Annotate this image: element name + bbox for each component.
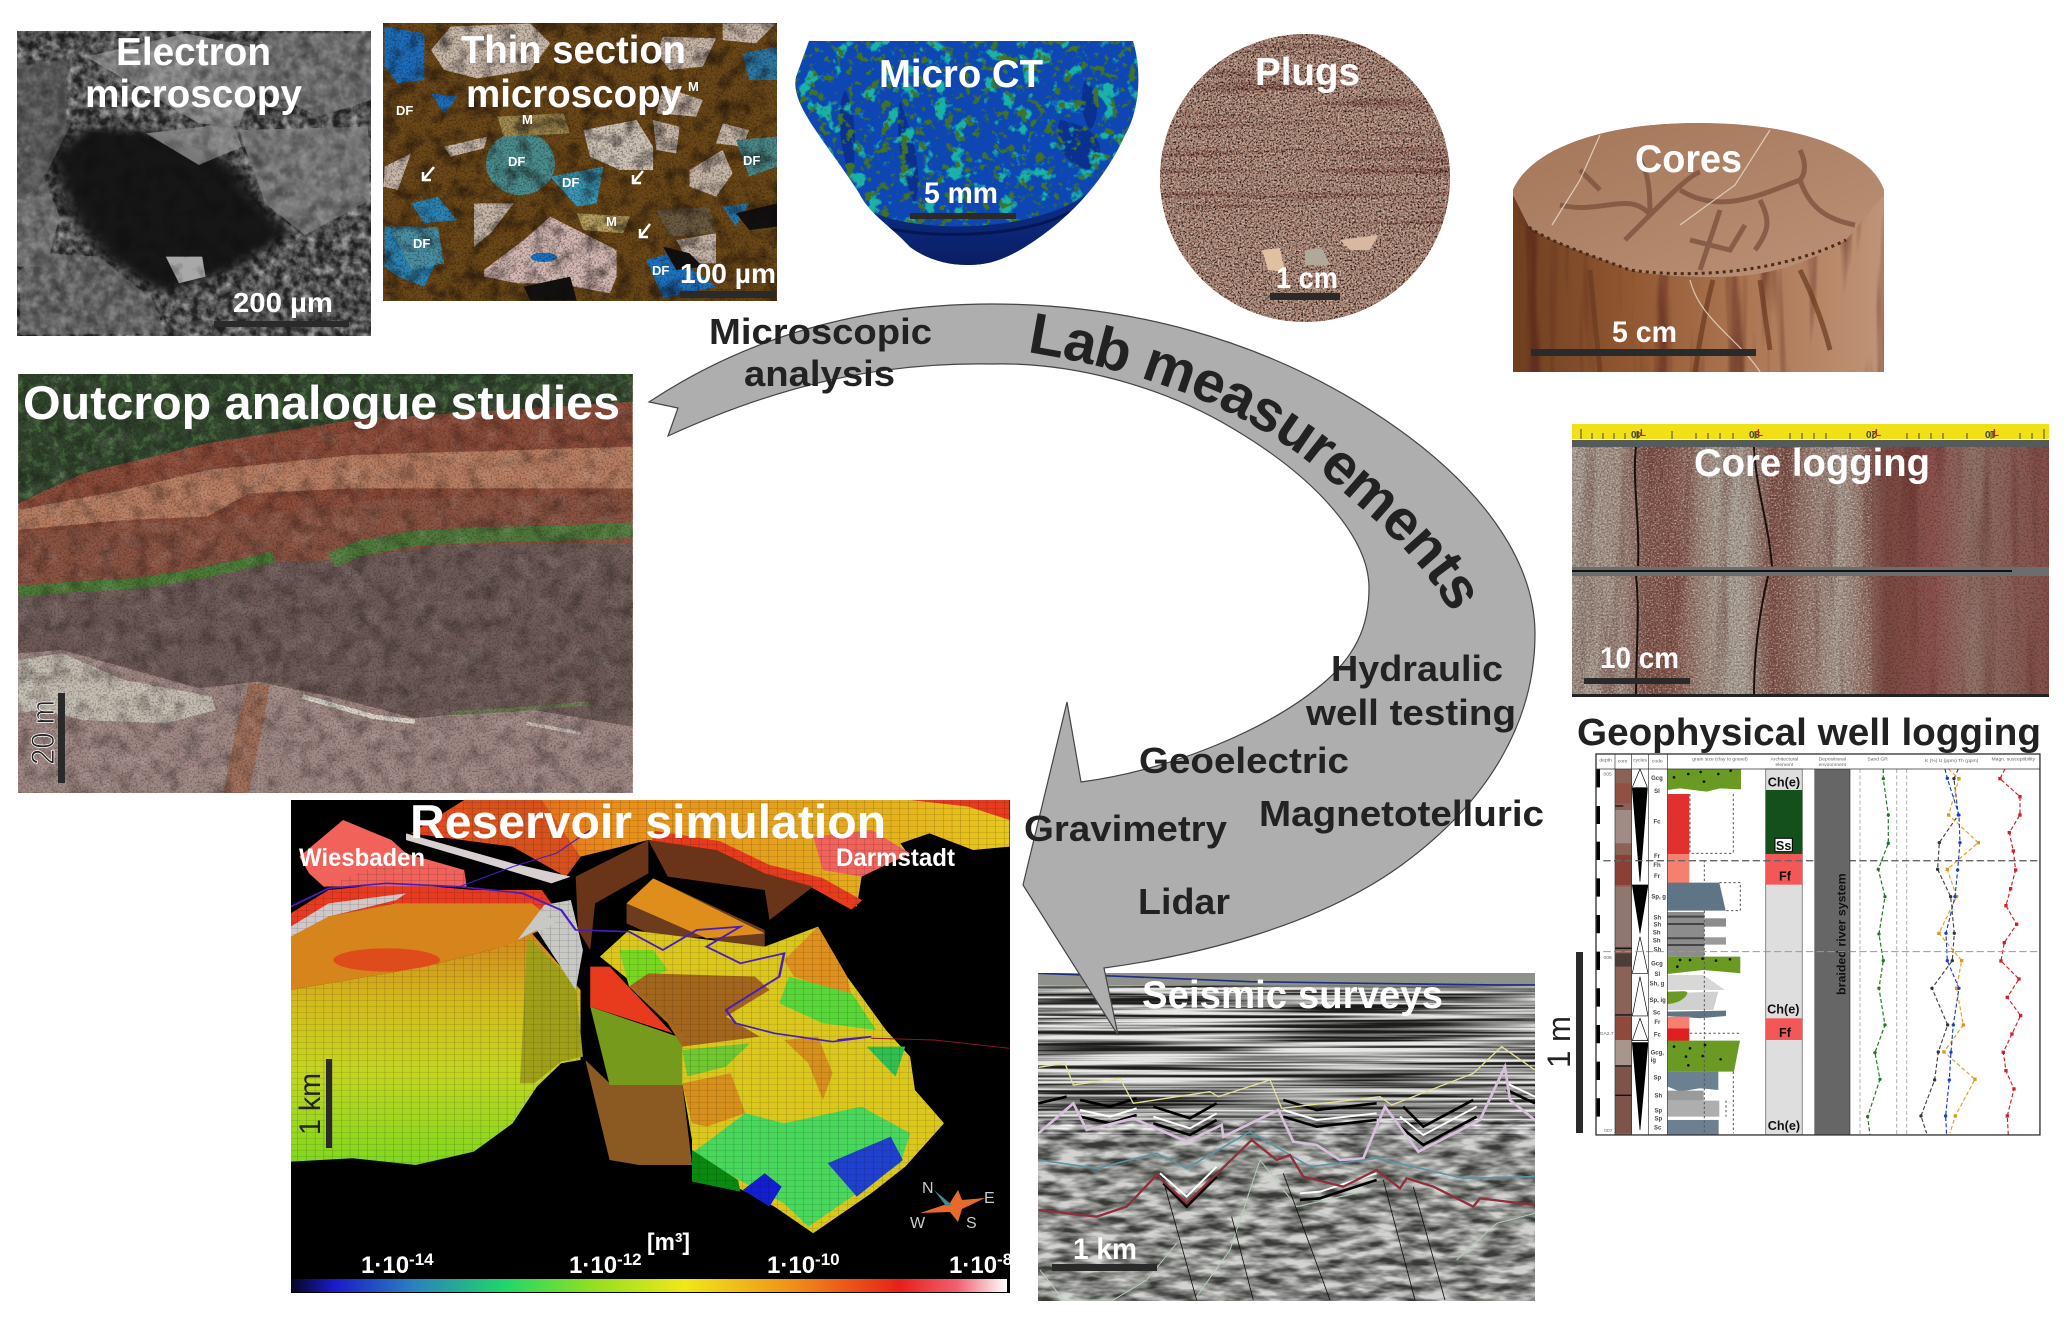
scale bar: 1 m — [1541, 952, 1583, 1133]
facies codes: Sl — [1654, 972, 1660, 978]
measuring tape: 10 — [1984, 428, 1996, 439]
mineral labels — [396, 79, 760, 278]
column headers: code — [1652, 759, 1663, 765]
column headers: environment — [1819, 762, 1847, 768]
city labels: Darmstadt — [836, 844, 956, 872]
panel: reservoir simulation — [291, 795, 1012, 1293]
panel: core logging — [1572, 424, 2049, 697]
heading: Electron — [116, 31, 271, 74]
facies codes: Sh — [1653, 948, 1661, 954]
scale bar: 5 cm — [1531, 316, 1756, 356]
mineral labels: M — [606, 214, 617, 229]
facies codes: Gcg, — [1651, 1050, 1664, 1056]
architectural element column: Ff — [1779, 869, 1792, 883]
icon: compass: N — [922, 1180, 934, 1197]
icon: compass — [910, 1180, 995, 1232]
measuring tape: L — [1993, 428, 1999, 439]
panel: plugs — [1160, 34, 1450, 322]
icon: compass: S — [966, 1215, 977, 1232]
colour scale — [291, 1279, 1007, 1292]
depositional environment column: braided river system — [1835, 873, 1849, 995]
arrows — [423, 167, 650, 237]
mineral labels: DF — [652, 263, 669, 278]
curved heading: Lab measurements: Lab measurements — [1030, 313, 1473, 608]
architectural element column: Ch(e) — [1768, 1119, 1800, 1133]
heading: Geophysical well logging — [1577, 712, 2041, 754]
facies codes: Sp — [1654, 1109, 1662, 1115]
mineral labels: DF — [413, 236, 430, 251]
label: microscopic analysis: analysis — [744, 353, 895, 394]
facies codes: Sh — [1653, 923, 1661, 929]
scale bar: 1 cm: 1 cm — [1276, 262, 1338, 295]
label: microscopic analysis — [709, 311, 932, 394]
column headers: Magn. susceptibility — [1992, 757, 2036, 763]
mineral labels: DF — [743, 153, 760, 168]
facies codes: Sp, ig — [1650, 998, 1666, 1004]
label: lidar: Lidar — [1138, 881, 1230, 922]
column headers: grain size (clay to gravel) — [1692, 757, 1748, 763]
depth ruler: 006 — [1603, 955, 1612, 961]
label: hydraulic well testing — [1305, 648, 1516, 733]
heading: microscopy — [466, 73, 682, 116]
facies codes: Fr — [1654, 1020, 1661, 1026]
column headers: element — [1775, 762, 1794, 768]
scale bar: 1 m: 1 m — [1541, 1016, 1577, 1068]
SEM image — [17, 31, 371, 336]
micro CT image — [790, 41, 1145, 270]
facies codes: Gcg — [1651, 776, 1663, 782]
lithology column — [1668, 769, 1741, 1135]
scale bar: 5 cm: 5 cm — [1612, 316, 1677, 349]
icon: compass: E — [984, 1190, 995, 1207]
column headers: cycles — [1633, 758, 1647, 764]
measuring tape: 30 — [1748, 428, 1760, 439]
facies codes: Gcg — [1651, 961, 1663, 967]
thin section image — [383, 23, 777, 301]
facies codes: Sc — [1653, 1010, 1661, 1016]
measuring tape: L — [1640, 428, 1646, 439]
scale bar: 10 cm — [1584, 642, 1690, 684]
label: hydraulic well testing: Hydraulic — [1331, 648, 1503, 689]
facies codes: Fh — [1653, 863, 1661, 869]
log curves — [1860, 769, 2021, 1135]
chart frame — [1596, 754, 2040, 1135]
heading: microscopy — [85, 73, 302, 116]
icon: compass: W — [910, 1215, 926, 1232]
label: microscopic analysis: Microscopic — [709, 311, 932, 352]
colour scale labels: -8 — [997, 1250, 1012, 1269]
scale bar: 20 m: 20 m — [25, 700, 61, 765]
label: magnetotelluric: Magnetotelluric — [1259, 793, 1544, 834]
depth ruler: 005 — [1603, 771, 1612, 777]
facies codes: Fr — [1654, 874, 1661, 880]
column headers: Sand GR — [1867, 757, 1888, 763]
architectural element column — [1766, 769, 1802, 1135]
colour scale labels: [m³] — [647, 1229, 690, 1256]
column headers — [1599, 757, 2036, 768]
measuring tape — [1572, 424, 2049, 439]
facies codes — [1650, 776, 1666, 1131]
facies codes: Sh — [1653, 939, 1661, 945]
scale bar: 1 km — [294, 1059, 332, 1148]
facies codes: Fr — [1654, 854, 1661, 860]
panel: cores — [1503, 123, 1890, 372]
outcrop image — [18, 374, 633, 793]
colour scale labels: 1·10 — [949, 1252, 997, 1279]
facies codes: Sc — [1654, 1125, 1662, 1131]
city labels — [299, 844, 956, 872]
heading: Cores — [1635, 138, 1742, 181]
depth ruler: 007 — [1604, 1128, 1613, 1134]
panel: thin section microscopy — [383, 23, 777, 301]
panel: outcrop analogue studies — [18, 374, 633, 793]
colour scale labels: 1·10 — [569, 1252, 617, 1279]
well log chart — [1596, 754, 2040, 1135]
depth ruler — [1598, 769, 1614, 1134]
heading: Outcrop analogue studies — [23, 376, 620, 429]
scale bar: 10 cm: 10 cm — [1600, 642, 1679, 675]
mineral labels: M — [522, 112, 533, 127]
colour scale labels: 1·10 — [767, 1252, 815, 1279]
panel: electron microscopy — [17, 31, 371, 336]
facies codes: Sh — [1653, 915, 1661, 921]
scale bar: 1 km — [1052, 1233, 1157, 1271]
depositional environment column — [1814, 769, 1850, 1135]
label: hydraulic well testing: well testing — [1305, 692, 1516, 733]
colour scale labels: 1·10 — [361, 1252, 409, 1279]
facies codes: Sh — [1653, 930, 1661, 936]
facies codes: Sp, g — [1651, 895, 1666, 901]
core photo column — [1615, 769, 1632, 1135]
heading: Plugs — [1255, 51, 1360, 94]
column headers: core — [1618, 759, 1628, 765]
facies codes: Fc — [1653, 819, 1661, 825]
simulation model — [291, 800, 1010, 1293]
panel: micro CT — [790, 41, 1145, 270]
scale bar: 5 mm — [910, 177, 1016, 219]
heading: Seismic surveys — [1142, 974, 1443, 1017]
mineral labels: DF — [508, 154, 525, 169]
city labels: Wiesbaden — [299, 844, 425, 872]
heading: Thin section — [461, 29, 686, 72]
facies codes: Sl — [1654, 789, 1660, 795]
mineral labels: DF — [562, 175, 579, 190]
label: gravimetry: Gravimetry — [1024, 808, 1227, 849]
facies codes: ig — [1651, 1058, 1656, 1064]
heading: Reservoir simulation — [410, 795, 886, 848]
seismic section — [1038, 973, 1535, 1301]
measuring tape: L — [1757, 428, 1763, 439]
depth ruler: GA2.7 — [1600, 1031, 1614, 1037]
core image — [1503, 123, 1890, 372]
panel: seismic surveys — [1038, 973, 1535, 1301]
architectural element column: Ff — [1779, 1026, 1792, 1040]
facies codes: Fc — [1654, 1032, 1661, 1038]
mineral labels: M — [688, 79, 699, 94]
scale bar: 1 km: 1 km — [1073, 1233, 1137, 1266]
measuring tape: 20 — [1865, 428, 1877, 439]
heading — [85, 31, 302, 116]
scale bar: 5 mm: 5 mm — [924, 177, 998, 210]
colour scale labels: -10 — [815, 1250, 840, 1269]
architectural element column: Ss — [1776, 839, 1791, 853]
facies codes: Sh, g — [1650, 981, 1665, 987]
core photograph — [1572, 424, 2049, 697]
heading — [461, 29, 686, 116]
colour scale labels — [361, 1229, 1012, 1279]
column headers: K (%) U (ppm) Th (ppm) — [1925, 758, 1979, 764]
scale bar: 200 µm — [214, 287, 349, 327]
facies codes: Sh — [1654, 1093, 1662, 1099]
plug image — [1160, 34, 1450, 322]
measuring tape: 40 — [1630, 428, 1642, 439]
mineral labels: DF — [396, 103, 413, 118]
colour scale labels: -14 — [409, 1250, 434, 1269]
colour scale labels: -12 — [617, 1250, 642, 1269]
heading: Micro CT — [879, 53, 1043, 96]
architectural element column: Ch(e) — [1768, 776, 1800, 790]
architectural element column: Ch(e) — [1767, 1002, 1799, 1016]
scale bar: 100 µm: 100 µm — [680, 258, 776, 289]
panel: geophysical well logging — [1541, 712, 2041, 1135]
facies codes: Sp — [1654, 1117, 1662, 1123]
column headers: Depositional — [1819, 757, 1846, 763]
cycle triangles — [1632, 769, 1648, 1130]
label: geoelectric: Geoelectric — [1139, 740, 1349, 781]
arrow: lab measurements workflow — [648, 303, 1536, 1036]
core box dividers — [1572, 440, 2049, 697]
measuring tape: L — [1875, 428, 1881, 439]
scale bar: 200 µm: 200 µm — [233, 287, 333, 318]
column headers: Architectural — [1770, 757, 1798, 763]
scale bar: 1 km: 1 km — [294, 1073, 327, 1135]
facies codes: Sp — [1653, 1076, 1661, 1082]
method labels on arrow — [709, 311, 1544, 922]
heading: Core logging — [1694, 442, 1930, 485]
column headers: depth — [1599, 758, 1612, 764]
